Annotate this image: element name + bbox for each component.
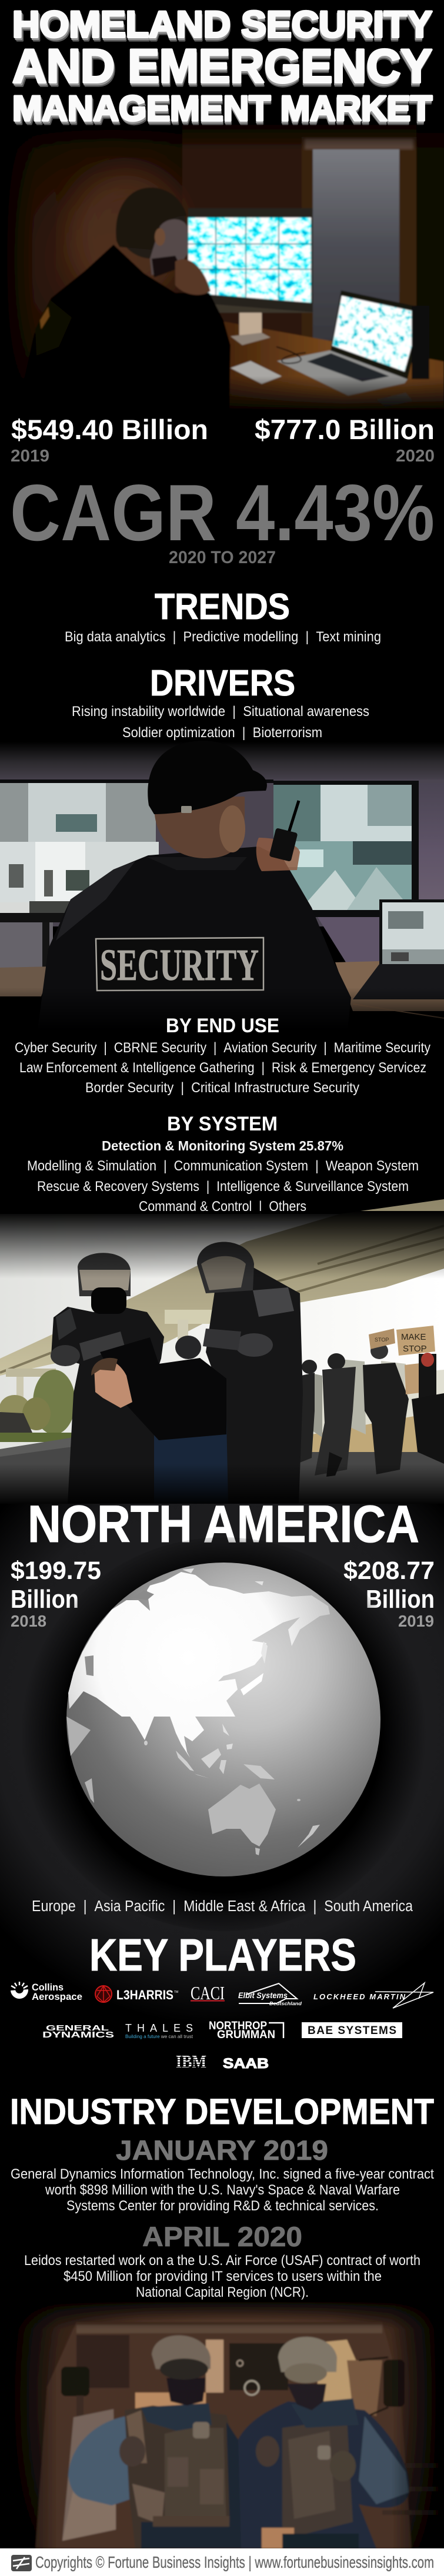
logo: Thales: THALES <box>125 2022 193 2034</box>
logo: Saab: SAAB <box>223 2056 269 2072</box>
by system list: Rescue & Recovery Systems | Intelligence & Surveillance System <box>37 1179 409 1195</box>
logo: IBM: IBM <box>176 2051 206 2072</box>
logo: Elbit Systems <box>238 1983 302 2006</box>
photo: guard in security jacket <box>0 741 444 1046</box>
drivers heading: DRIVERS <box>150 663 295 704</box>
photo: riot police arresting a protester: STOP <box>375 1337 389 1343</box>
logo: Collins Aerospace: Collins <box>32 1982 64 1993</box>
title: MANAGEMENT MARKET <box>15 92 431 132</box>
photo: security guard watching monitors <box>0 121 444 416</box>
drivers list: Soldier optimization | Bioterrorism <box>122 725 322 741</box>
market value 2020: 2020 <box>396 447 435 466</box>
date: January 2019: JANUARY 2019 <box>116 2135 328 2166</box>
logo: Collins Aerospace <box>11 1982 82 2002</box>
logo: Thales: Building a future we can all trust <box>125 2033 193 2039</box>
market value 2019: $549.40 Billion <box>11 414 208 445</box>
title <box>12 4 432 132</box>
logo: Northrop Grumman: NORTHROP <box>209 2020 267 2032</box>
north america value 2019: Billion <box>366 1585 435 1614</box>
north america value 2019: 2019 <box>398 1612 434 1630</box>
logo: BAE Systems: BAE SYSTEMS <box>308 2025 396 2037</box>
title: HOMELAND SECURITY <box>12 4 432 45</box>
drivers list: Rising instability worldwide | Situational awareness <box>72 704 369 720</box>
logo: Northrop Grumman <box>209 2020 283 2041</box>
photo: tactical soldiers in front of armoured truck <box>0 2300 444 2549</box>
logo: General Dynamics: DYNAMICS <box>42 2030 114 2040</box>
globe <box>21 1537 426 1931</box>
by system list: Command & Control | Others <box>139 1199 306 1215</box>
logo: L3Harris: L3HARRIS <box>116 1988 173 2002</box>
north america value 2018 <box>11 1557 101 1630</box>
market value 2019: 2019 <box>11 447 49 466</box>
leading system share: Detection & Monitoring System 25.87% <box>102 1138 343 1153</box>
trends list: Big data analytics | Predictive modelling | Text mining <box>65 629 381 645</box>
photo: guard in security jacket: SECURITY <box>100 941 259 990</box>
logo: Thales <box>125 2022 193 2039</box>
logo: Northrop Grumman: GRUMMAN <box>217 2029 275 2041</box>
by end use list <box>15 1040 430 1096</box>
north america value 2018: Billion <box>11 1585 79 1614</box>
logo: BAE Systems <box>302 2022 402 2038</box>
title: MANAGEMENT MARKET <box>12 89 432 128</box>
title: AND EMERGENCY <box>12 40 432 93</box>
logo: Lockheed Martin <box>313 1983 433 2008</box>
photo: riot police arresting a protester: MAKE <box>401 1332 426 1342</box>
development text: Leidos <box>24 2253 420 2300</box>
logo: Elbit Systems: Deutschland <box>269 2001 302 2006</box>
logo: Collins Aerospace: Aerospace <box>32 1991 82 2002</box>
north america value 2019: $208.77 <box>343 1557 435 1585</box>
development text: Leidos: National Capital Region (NCR). <box>136 2284 309 2300</box>
logo: CACI: CACI <box>191 1982 225 2003</box>
logo: General Dynamics: GENERAL <box>46 2023 109 2032</box>
title: MANAGEMENT MARKET <box>14 91 431 131</box>
north america value 2018: 2018 <box>11 1612 46 1630</box>
development text: Leidos: $450 Million for providing IT services to users within the <box>64 2269 382 2284</box>
drivers list <box>72 704 369 741</box>
title: AND EMERGENCY <box>15 44 431 96</box>
logo: Lockheed Martin: LOCKHEED MARTIN <box>313 1992 406 2001</box>
market value 2020 <box>255 414 435 466</box>
north america value 2019 <box>343 1557 435 1630</box>
trends heading: TRENDS <box>155 587 290 627</box>
globe section background <box>0 1504 444 2092</box>
development text: General Dynamics: worth $898 Million with the U.S. Navy's Space & Naval Warfare <box>45 2182 400 2198</box>
market value 2019 <box>11 414 208 466</box>
logo: Elbit Systems: Elbit Systems <box>238 1990 288 2000</box>
by end use heading: BY END USE <box>166 1015 279 1037</box>
date: April 2020: APRIL 2020 <box>142 2221 302 2252</box>
market value 2020: $777.0 Billion <box>255 414 435 445</box>
by end use list: Border Security | Critical Infrastructure Security <box>85 1080 359 1096</box>
other regions list: Europe | Asia Pacific | Middle East & Africa | South America <box>32 1898 413 1915</box>
title: HOMELAND SECURITY <box>15 8 431 49</box>
north america value 2018: $199.75 <box>11 1557 101 1585</box>
development text: General Dynamics <box>11 2166 434 2214</box>
logo: L3Harris <box>95 1986 178 2002</box>
logo: L3Harris: TM <box>174 1990 178 1994</box>
by system list <box>27 1158 419 1215</box>
photo: riot police arresting a protester <box>0 1199 444 1511</box>
key players heading: KEY PLAYERS <box>89 1930 356 1980</box>
logo: General Dynamics <box>42 2023 114 2040</box>
CAGR period: 2020 TO 2027 <box>169 548 276 567</box>
development text: General Dynamics: Systems Center for providing R&D & technical services. <box>66 2198 379 2214</box>
footer bar <box>0 2548 444 2576</box>
photo: riot police arresting a protester: STOP <box>403 1344 427 1354</box>
title: HOMELAND SECURITY <box>14 6 431 47</box>
title: AND EMERGENCY <box>14 42 431 95</box>
by system heading: BY SYSTEM <box>167 1113 278 1135</box>
